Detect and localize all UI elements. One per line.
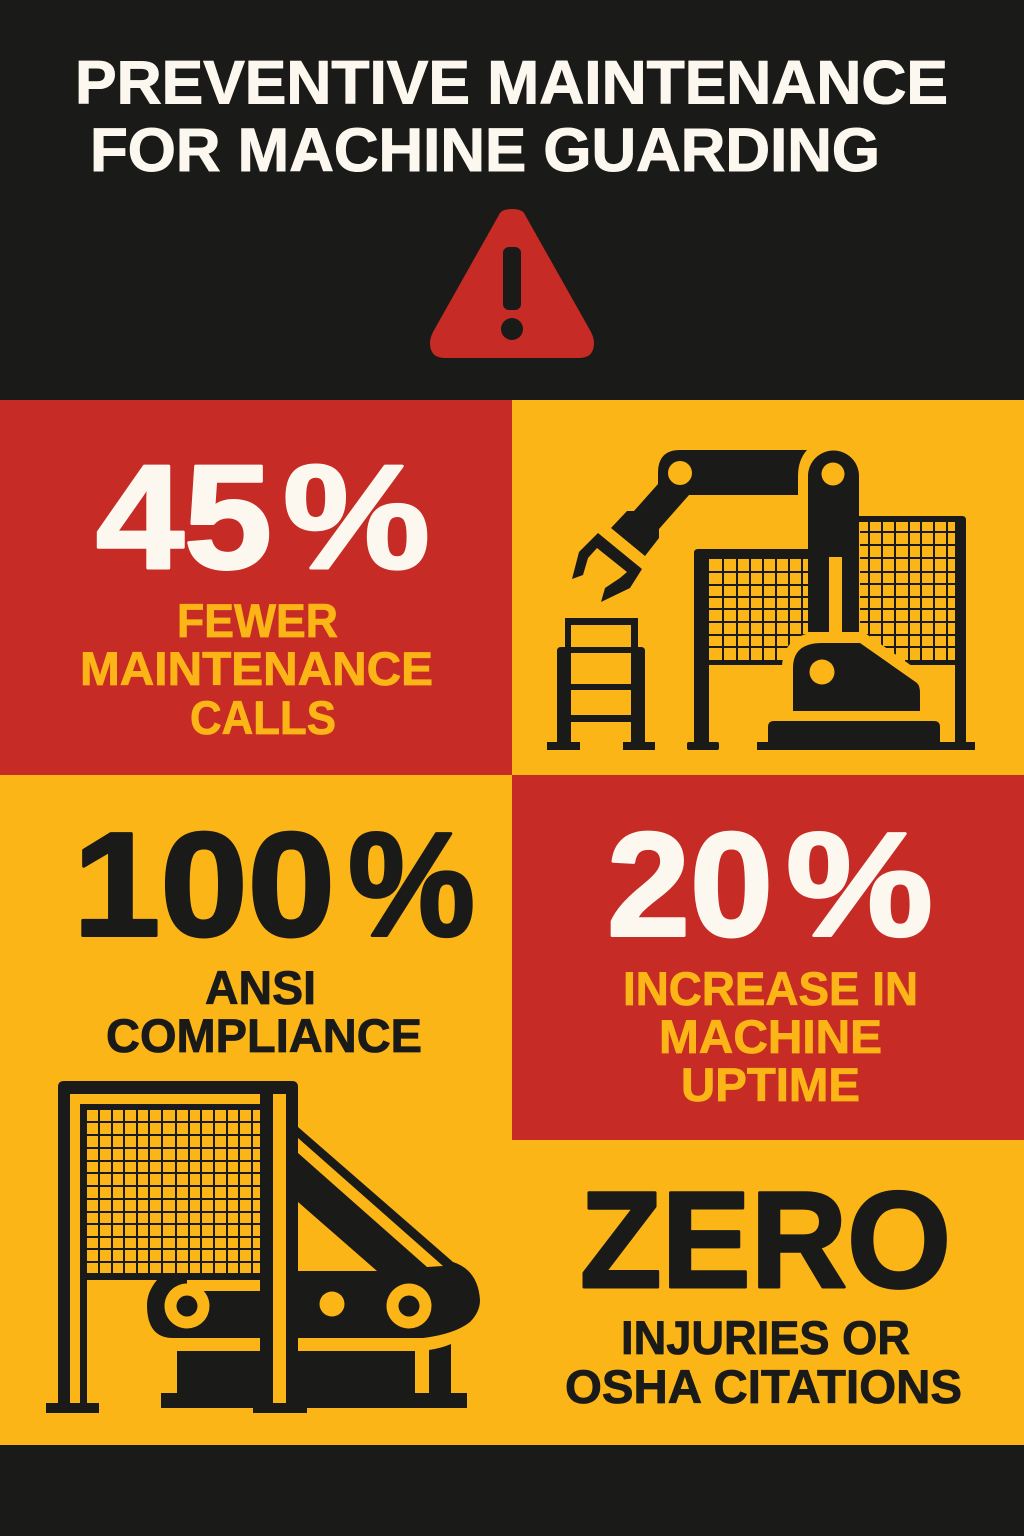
footer band — [0, 1445, 1024, 1536]
icon: robot arm — [572, 450, 975, 750]
icon: warning triangle — [430, 209, 594, 358]
label: increase in machine uptime: UPTIME — [681, 1058, 860, 1111]
panel: 100% ANSI compliance — [0, 775, 512, 1445]
stat: 45% — [96, 435, 430, 600]
label: injuries or OSHA citations: INJURIES OR — [621, 1311, 910, 1364]
stat: 20% — [607, 802, 933, 968]
label: fewer maintenance calls: FEWER — [177, 594, 338, 647]
label: fewer maintenance calls: CALLS — [190, 691, 336, 744]
label: ANSI compliance: COMPLIANCE — [106, 1009, 422, 1062]
stat: 100%: 100 — [73, 802, 335, 968]
title: FOR MACHINE GUARDING — [90, 116, 880, 184]
icon: guard frame and mesh — [46, 1081, 307, 1413]
header band — [0, 0, 1024, 400]
stat: ZERO: ZERO — [580, 1164, 951, 1317]
label: fewer maintenance calls: MAINTENANCE — [80, 642, 433, 695]
label: injuries or OSHA citations: OSHA CITATIONS — [565, 1360, 962, 1413]
label: ANSI compliance: ANSI — [205, 961, 316, 1014]
label: increase in machine uptime — [623, 962, 918, 1111]
panel: zero injuries or OSHA citations — [512, 1140, 1024, 1445]
label: fewer maintenance calls — [80, 594, 433, 744]
stat: 100%: % — [348, 802, 475, 968]
label: increase in machine uptime: MACHINE — [659, 1010, 882, 1063]
stat: 100% — [73, 802, 475, 968]
title — [75, 48, 948, 184]
title: PREVENTIVE MAINTENANCE — [75, 48, 948, 116]
stat: 45%: % — [283, 435, 430, 600]
stat: 20%: % — [786, 802, 933, 968]
label: injuries or OSHA citations — [565, 1311, 962, 1413]
stat: 45%: 45 — [96, 435, 272, 600]
label: increase in machine uptime: INCREASE IN — [623, 962, 918, 1015]
stat: 20%: 20 — [607, 802, 773, 968]
panel: robot arm illustration — [512, 400, 1024, 775]
icon: parts stand — [547, 618, 655, 750]
label: ANSI compliance — [106, 961, 422, 1062]
icon: safety fence mesh — [687, 516, 966, 750]
panel: 45% fewer maintenance calls — [0, 400, 512, 775]
icon: guarded conveyor machine — [46, 1081, 480, 1413]
panel: 20% increase in machine uptime — [512, 775, 1024, 1140]
